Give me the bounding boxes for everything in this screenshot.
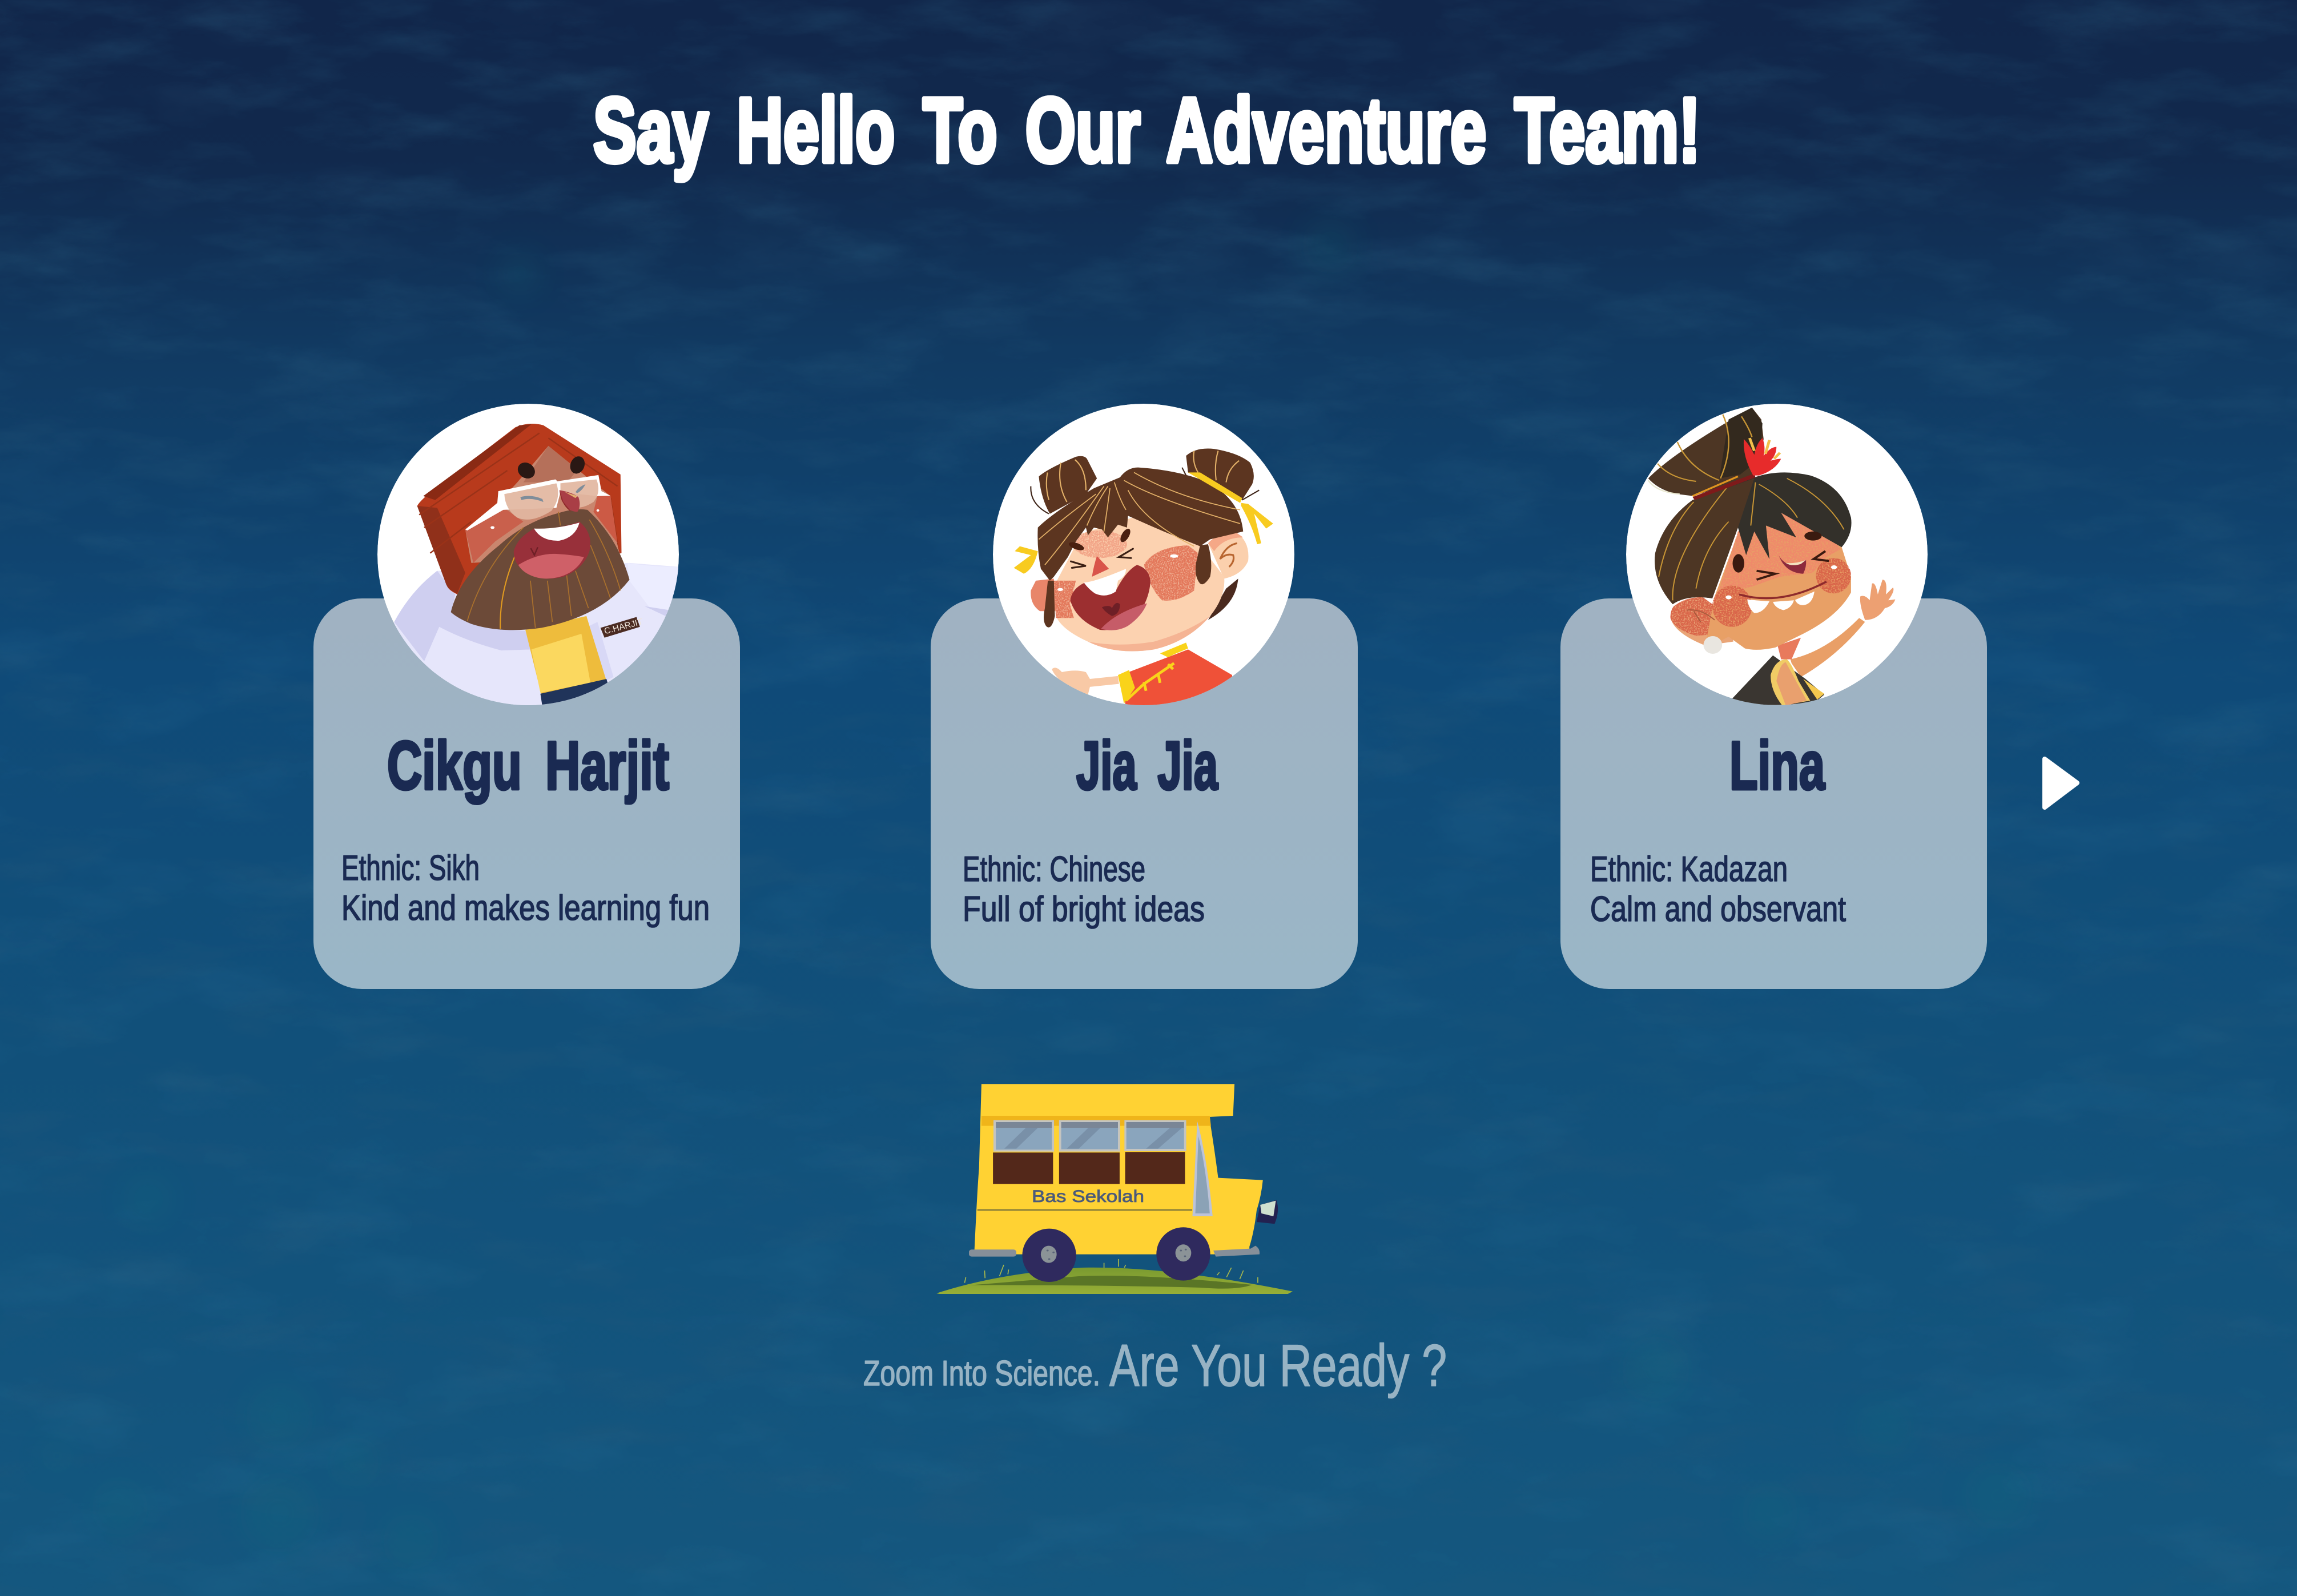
icon: next arrow [2045,759,2077,807]
description: Calm and observant [1590,890,1846,929]
card background [1560,598,1987,989]
bus label: Bas Sekolah [1032,1187,1144,1206]
description [963,850,1205,929]
description [1590,850,1846,929]
name: Cikgu Harjit [387,727,669,804]
description: Ethnic: Chinese [963,850,1145,889]
panel: Jia Jia [931,404,1358,989]
description: Ethnic: Sikh [341,849,480,888]
illustration: school bus [936,1084,1293,1294]
panel: Lina [1560,404,1987,989]
title: Say Hello To Our Adventure Team! [593,79,1700,181]
tagline [863,1333,1447,1399]
description: Ethnic: Kadazan [1590,850,1788,889]
tagline: Are You Ready ? [1109,1333,1447,1399]
card background [313,598,740,989]
card background [931,598,1358,989]
tagline: Zoom Into Science. [863,1354,1100,1393]
description [341,849,710,928]
portrait: Cikgu Harjit [377,404,679,708]
portrait: Lina [1626,404,1928,706]
name: Lina [1729,727,1825,804]
panel: Cikgu Harjit [313,404,740,989]
portrait: Cikgu Harjit: C.HARJIT [603,617,644,636]
name: Jia Jia [1076,727,1218,804]
description: Full of bright ideas [963,890,1205,929]
portrait: Jia Jia [993,404,1294,708]
description: Kind and makes learning fun [341,889,710,928]
